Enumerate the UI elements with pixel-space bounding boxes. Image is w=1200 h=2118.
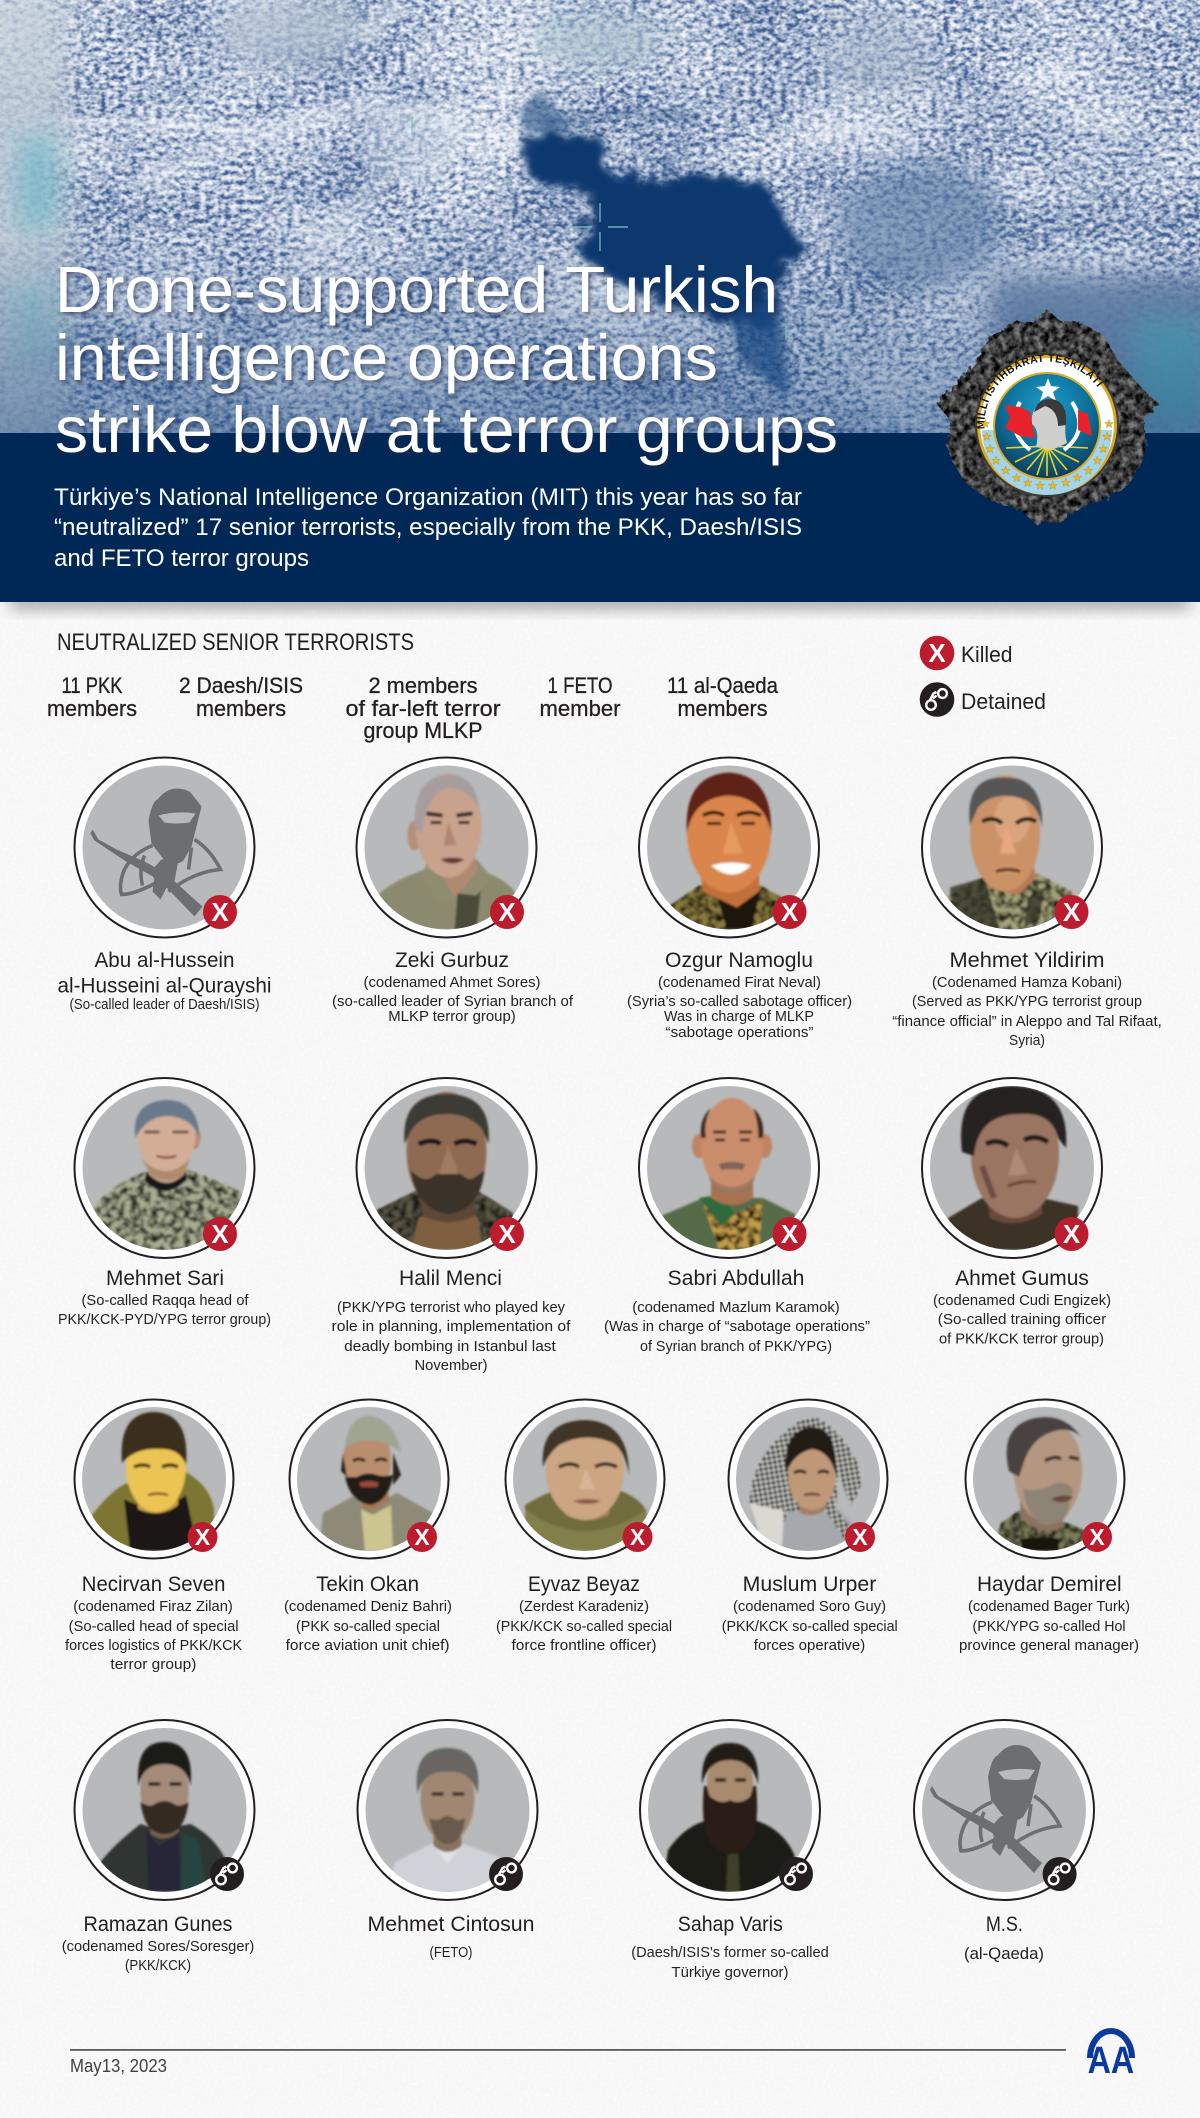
group count: al-Qaeda: members: [678, 696, 768, 721]
description: [892, 974, 1162, 1049]
profile: Muslum Urper: [722, 1400, 898, 1654]
group count: PKK: 11 PKK: [62, 673, 123, 698]
navy banner: [0, 433, 1200, 608]
targeting crosshair: [411, 118, 786, 340]
description: role in planning, implementation of: [332, 1318, 571, 1335]
description: (PKK/KCK so-called special: [496, 1618, 672, 1635]
portrait: [922, 758, 1102, 938]
description: (So-called head of special: [69, 1618, 239, 1635]
badge: killed: X: [498, 897, 516, 927]
badge: killed: X: [195, 1524, 211, 1550]
badge: killed: X: [630, 1524, 646, 1550]
description: [284, 1598, 452, 1654]
description: (codenamed Cudi Engizek): [933, 1292, 1111, 1309]
group count: FETO: 1 FETO: [548, 673, 612, 698]
badge: killed: [622, 1522, 652, 1552]
profile: Sabri Abdullah: [604, 1078, 870, 1355]
description: forces logistics of PKK/KCK: [65, 1637, 242, 1654]
name: Ozgur Namoglu: [665, 949, 813, 972]
badge: killed: [772, 895, 806, 929]
group count: FETO: [540, 673, 620, 721]
badge: detained: [489, 1857, 523, 1891]
date: May13, 2023: [70, 2056, 167, 2076]
badge: killed: [203, 1217, 237, 1251]
group count: FETO: member: [540, 696, 620, 721]
name: Zeki Gurbuz: [395, 949, 509, 972]
portrait: [728, 1400, 888, 1558]
description: (codenamed Sores/Soresger): [62, 1938, 254, 1955]
description: force frontline officer): [512, 1637, 656, 1654]
description: Türkiye governor): [672, 1964, 788, 1981]
group count: Daesh/ISIS: [179, 673, 303, 721]
description: (codenamed Bager Turk): [968, 1598, 1130, 1615]
section heading: NEUTRALIZED SENIOR TERRORISTS: [57, 629, 414, 656]
portrait: [74, 1400, 234, 1558]
profile: Ramazan Gunes: [62, 1720, 254, 1974]
description: (codenamed Mazlum Karamok): [632, 1299, 840, 1316]
description: terror group): [110, 1656, 196, 1673]
name: Ramazan Gunes: [84, 1913, 232, 1936]
description: (Served as PKK/YPG terrorist group: [912, 993, 1142, 1010]
name: Mehmet Sari: [106, 1267, 224, 1290]
name: Muslum Urper: [743, 1573, 876, 1596]
description: MLKP terror group): [388, 1008, 516, 1025]
name: Mehmet Cintosun: [368, 1913, 534, 1936]
description: [62, 1938, 254, 1974]
description: (Codenamed Hamza Kobani): [932, 974, 1122, 991]
profile: M.S.: [914, 1720, 1094, 1963]
description: [722, 1598, 898, 1654]
description: [631, 1944, 829, 1981]
description: Was in charge of MLKP: [664, 1008, 814, 1025]
group count: PKK: members: [47, 696, 137, 721]
portrait: silhouette: [74, 758, 254, 938]
badge: killed: [772, 1217, 806, 1251]
name: Mehmet Yildirim: [950, 949, 1104, 972]
profile: Ahmet Gumus: [922, 1078, 1111, 1348]
legend: detained: Detained: [961, 689, 1046, 714]
name: Sahap Varis: [678, 1913, 783, 1936]
description: (So-called leader of Daesh/ISIS): [70, 996, 260, 1013]
portrait: [639, 758, 819, 938]
description: (codenamed Ahmet Sores): [364, 974, 540, 991]
footer: [70, 2031, 1134, 2082]
description: PKK/KCK-PYD/YPG terror group): [58, 1311, 271, 1328]
name: Necirvan Seven: [82, 1573, 225, 1596]
title: Drone-supported Turkish: [55, 253, 778, 326]
name: Halil Menci: [399, 1267, 502, 1290]
badge: killed: [188, 1522, 218, 1552]
emblem: MIT seal: [936, 310, 1160, 526]
description: of Syrian branch of PKK/YPG): [640, 1338, 832, 1355]
portrait: [922, 1078, 1102, 1258]
badge: killed: X: [781, 897, 799, 927]
legend: killed: Killed: [961, 642, 1012, 667]
badge: killed: X: [498, 1219, 516, 1249]
title: strike blow at terror groups: [55, 393, 838, 466]
description: (Zerdest Karadeniz): [519, 1598, 649, 1615]
logo: AA: AA: [1088, 2040, 1134, 2082]
description: (PKK/YPG terrorist who played key: [337, 1299, 565, 1316]
portrait: silhouette: [914, 1720, 1094, 1900]
badge: killed: X: [781, 1219, 799, 1249]
description: deadly bombing in Istanbul last: [344, 1338, 557, 1355]
description: [604, 1299, 870, 1355]
profile: Mehmet Yildirim: [892, 758, 1162, 1049]
description: (Daesh/ISIS's former so-called: [631, 1944, 829, 1961]
emblem: MIT seal: MİLLİ İSTİHBARAT TEŞKİLÂTI: [976, 354, 1103, 428]
description: of PKK/KCK terror group): [939, 1330, 1104, 1348]
description: (Syria’s so-called sabotage officer): [627, 993, 852, 1010]
title: [55, 253, 838, 466]
badge: killed: [490, 895, 524, 929]
description: “sabotage operations”: [666, 1024, 814, 1041]
group count: MLKP: 2 members: [368, 673, 478, 698]
legend: killed: [920, 636, 1012, 670]
group count: MLKP: [346, 673, 500, 743]
badge: killed: X: [211, 1219, 229, 1249]
name: Sabri Abdullah: [668, 1267, 804, 1290]
description: (so-called leader of Syrian branch of: [332, 993, 574, 1010]
description: (PKK so-called special: [296, 1618, 440, 1635]
portrait: [506, 1400, 664, 1558]
description: (codenamed Soro Guy): [733, 1598, 886, 1615]
portrait: [358, 1720, 538, 1900]
badge: killed: X: [1089, 1524, 1105, 1550]
portrait: [966, 1400, 1124, 1558]
badge: detained: [779, 1857, 813, 1891]
profile: Sahap Varis: [631, 1720, 829, 1981]
badge: killed: X: [852, 1524, 868, 1550]
description: (FETO): [430, 1944, 473, 1961]
profile: Abu al-Hussein al-Husseini al-Qurayshi: [58, 758, 272, 1013]
badge: killed: [845, 1522, 875, 1552]
description: Syria): [1009, 1032, 1045, 1049]
profile: Mehmet Cintosun: [358, 1720, 538, 1961]
badge: detained: [210, 1857, 244, 1891]
profile: Necirvan Seven: [65, 1400, 242, 1673]
portrait: [74, 1078, 254, 1258]
description: (So-called training officer: [938, 1311, 1106, 1328]
badge: killed: [1054, 895, 1088, 929]
description: “finance official” in Aleppo and Tal Rifaat,: [892, 1013, 1162, 1030]
profile: Halil Menci: [332, 1078, 571, 1374]
badge: killed: [1082, 1522, 1112, 1552]
description: (al-Qaeda): [964, 1944, 1044, 1963]
group count: al-Qaeda: 11 al-Qaeda: [667, 673, 779, 698]
name: Tekin Okan: [316, 1573, 419, 1596]
description: (Was in charge of “sabotage operations”: [604, 1318, 870, 1335]
description: (PKK/KCK so-called special: [722, 1618, 898, 1635]
title: intelligence operations: [55, 321, 718, 394]
intro paragraph: and FETO terror groups: [54, 545, 309, 572]
name: Haydar Demirel: [977, 1573, 1122, 1596]
badge: killed: [407, 1522, 437, 1552]
name: [58, 949, 272, 998]
portrait: [639, 1078, 819, 1258]
description: (codenamed Deniz Bahri): [284, 1598, 452, 1615]
profile: Ozgur Namoglu: [627, 758, 852, 1041]
group count: Daesh/ISIS: members: [196, 696, 286, 721]
description: [332, 974, 574, 1025]
intro paragraph: “neutralized” 17 senior terrorists, especially from the PKK, Daesh/ISIS: [54, 514, 802, 541]
group count: MLKP: of far-left terror: [346, 696, 500, 721]
profile: Zeki Gurbuz: [332, 758, 574, 1025]
profile: Eyvaz Beyaz: [496, 1400, 672, 1654]
legend: killed: X: [928, 638, 946, 668]
name: al-Husseini al-Qurayshi: [58, 974, 272, 998]
badge: killed: X: [414, 1524, 430, 1550]
badge: killed: [490, 1217, 524, 1251]
name: M.S.: [986, 1913, 1023, 1936]
description: [933, 1292, 1111, 1348]
portrait: [356, 758, 536, 938]
profile: Tekin Okan: [284, 1400, 452, 1654]
badge: killed: [1054, 1217, 1088, 1251]
legend: [920, 636, 1046, 717]
description: [496, 1598, 672, 1654]
badge: killed: [203, 895, 237, 929]
group count: PKK: [47, 673, 137, 721]
description: [58, 1292, 271, 1328]
profile: Mehmet Sari: [58, 1078, 271, 1328]
name: Ahmet Gumus: [955, 1267, 1089, 1290]
badge: killed: X: [1063, 1219, 1081, 1249]
intro paragraph: Türkiye’s National Intelligence Organization (MIT) this year has so far: [54, 484, 802, 511]
portrait: [640, 1720, 820, 1900]
description: (codenamed Firat Neval): [658, 974, 821, 991]
portrait: [356, 1078, 536, 1258]
portrait: [74, 1720, 254, 1900]
description: [332, 1299, 571, 1374]
description: (PKK/YPG so-called Hol: [972, 1618, 1126, 1635]
description: [65, 1598, 242, 1673]
description: forces operative): [754, 1637, 865, 1654]
description: force aviation unit chief): [286, 1637, 450, 1654]
badge: detained: [1043, 1857, 1077, 1891]
description: (codenamed Firaz Zilan): [73, 1598, 233, 1615]
group count: al-Qaeda: [667, 673, 779, 721]
description: [959, 1598, 1139, 1654]
intro paragraph: [54, 484, 802, 572]
name: Eyvaz Beyaz: [528, 1573, 640, 1596]
description: (PKK/KCK): [125, 1957, 191, 1974]
description: (So-called Raqqa head of: [82, 1292, 249, 1309]
badge: killed: X: [211, 897, 229, 927]
profile: Haydar Demirel: [959, 1400, 1139, 1654]
header hero: drone imagery: [0, 0, 1200, 450]
description: November): [414, 1357, 488, 1374]
name: Abu al-Hussein: [94, 949, 234, 972]
group count: Daesh/ISIS: 2 Daesh/ISIS: [179, 673, 303, 698]
description: province general manager): [959, 1637, 1139, 1654]
portrait: [290, 1400, 448, 1558]
group count: MLKP: group MLKP: [364, 718, 482, 743]
description: [627, 974, 852, 1041]
badge: killed: X: [1063, 897, 1081, 927]
